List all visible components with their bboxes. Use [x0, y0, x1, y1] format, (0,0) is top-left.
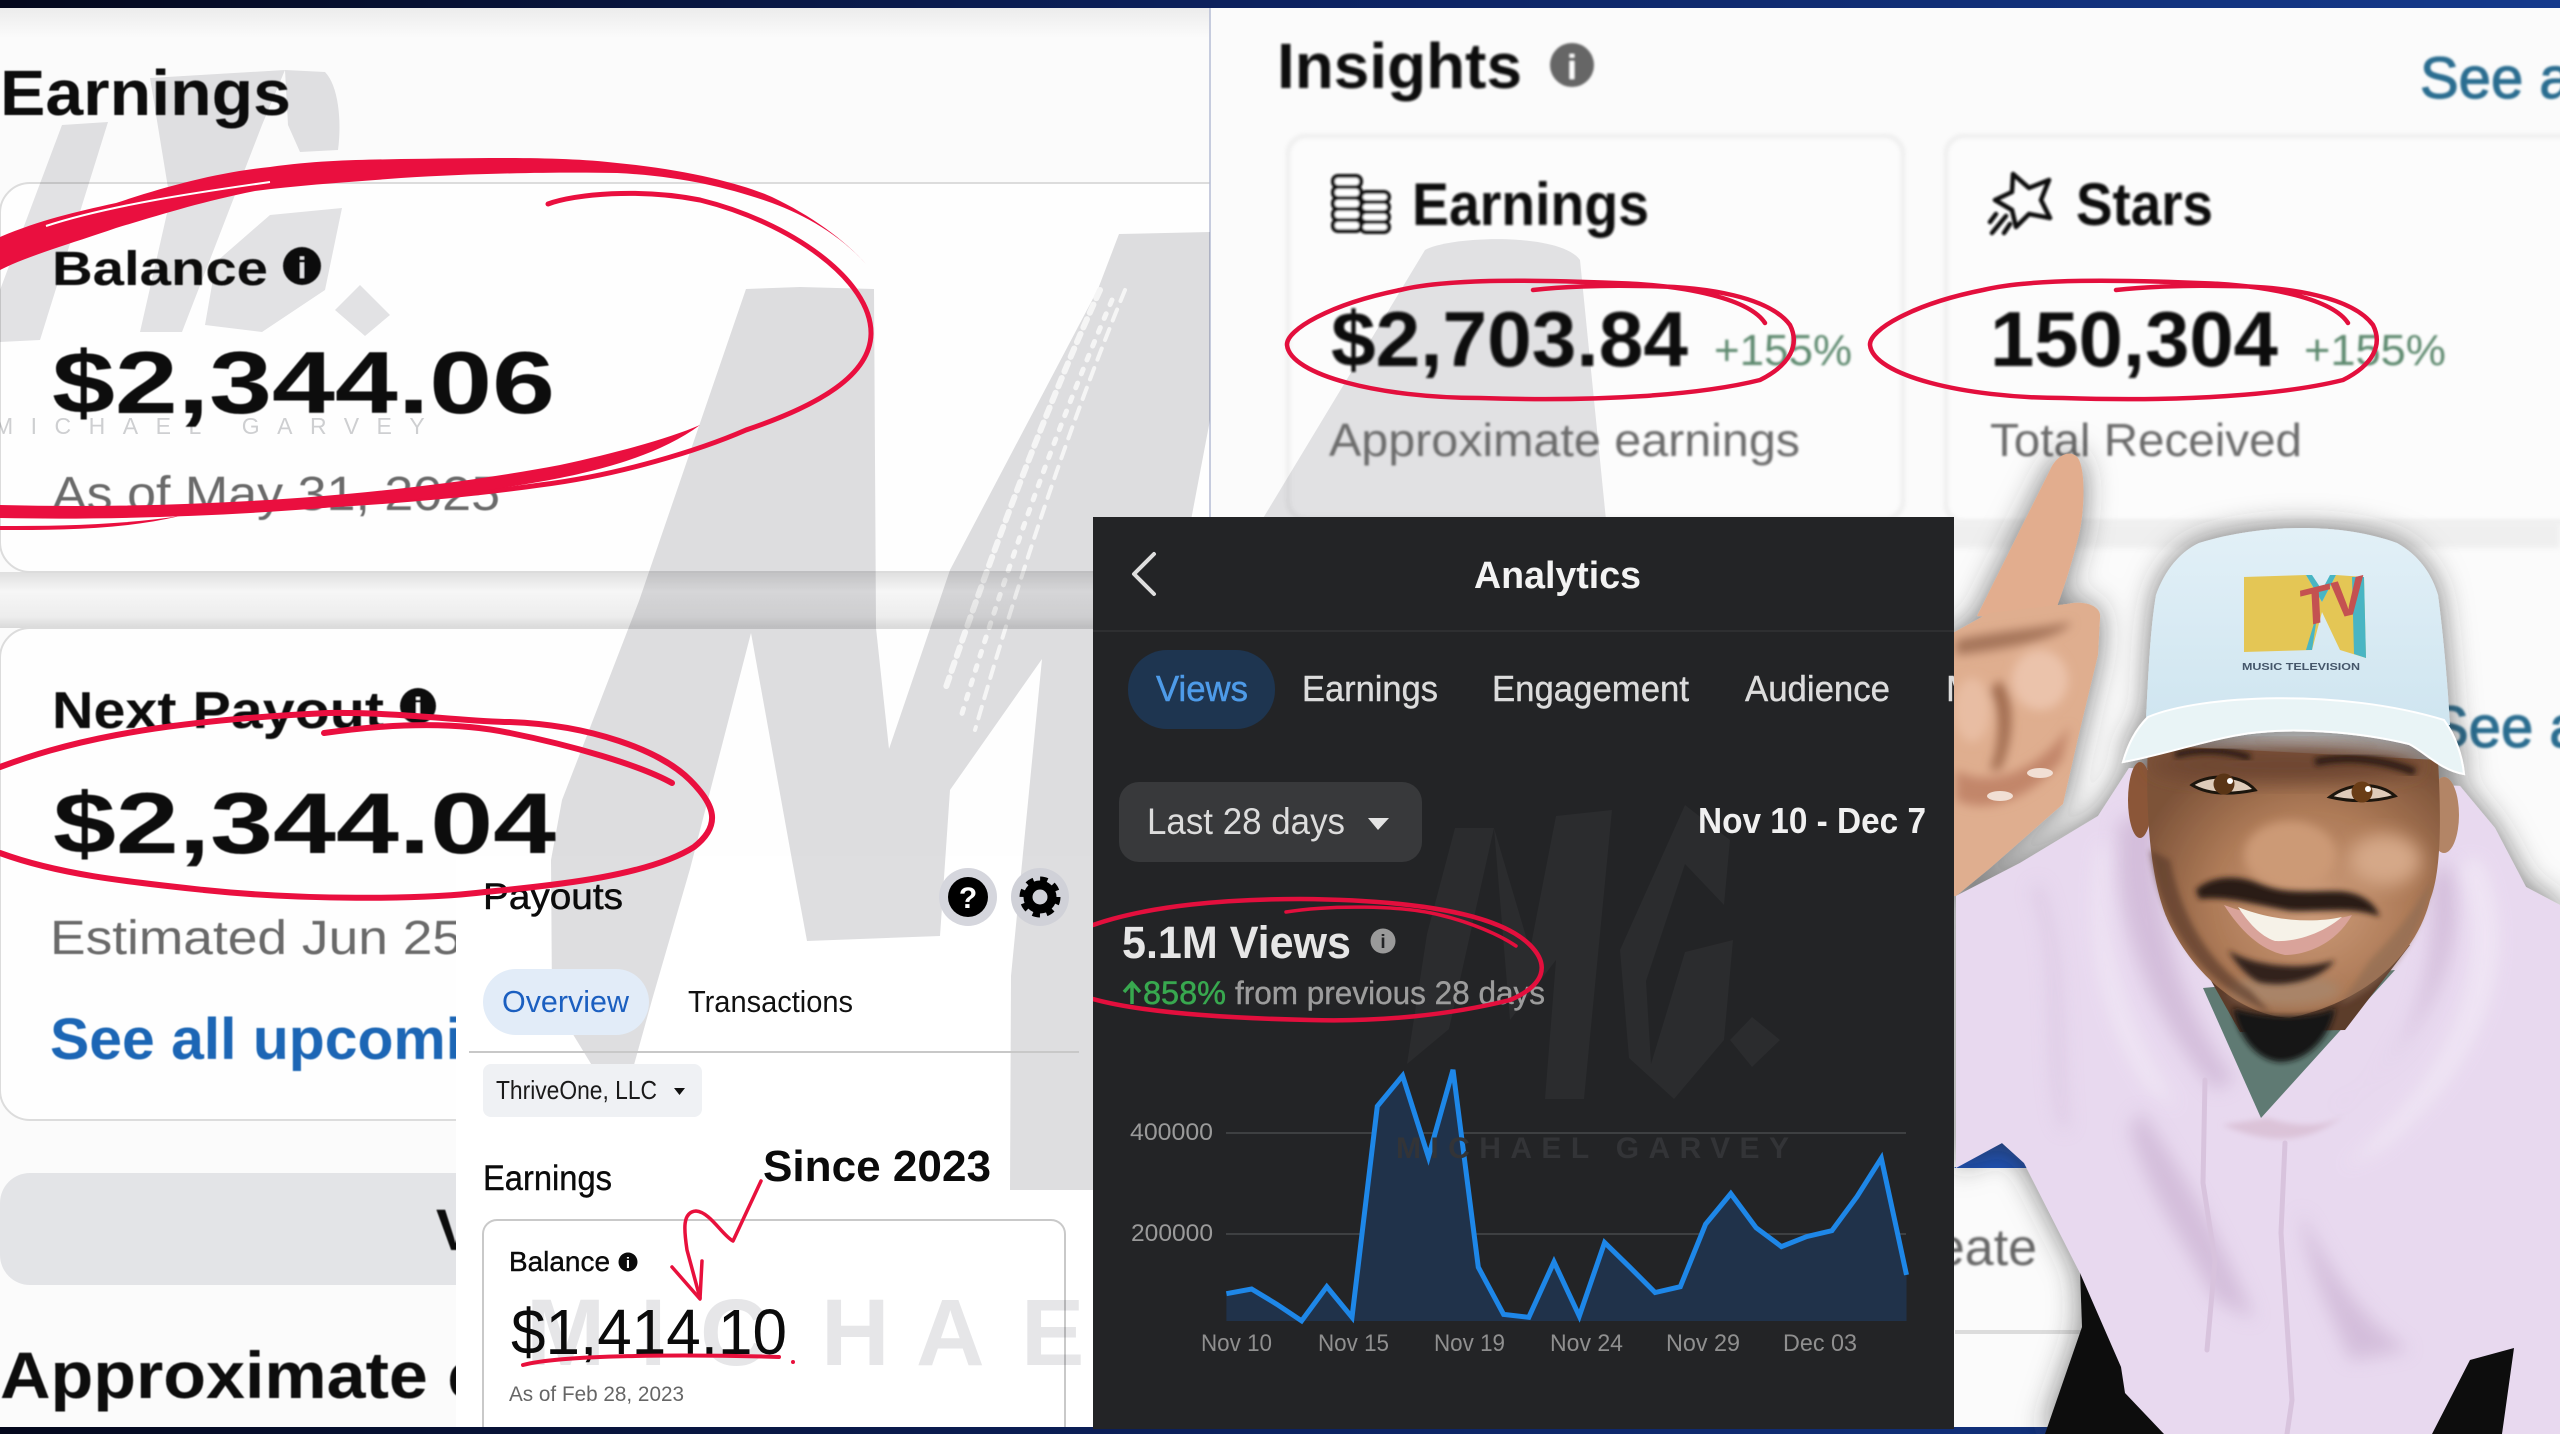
- left eye: [2192, 774, 2255, 794]
- left text block: [0, 57, 739, 1412]
- value: views: 5.1M Views: [1122, 917, 1351, 968]
- insights content: [1277, 30, 2560, 1334]
- panel: balance screenshot: [0, 8, 1260, 1285]
- dropdown: last 28 days: Last 28 days: [1147, 801, 1345, 842]
- fingernails: [2027, 768, 2053, 778]
- mustache: [2197, 879, 2378, 915]
- icon: shooting star: [1990, 174, 2050, 233]
- icon: help: [939, 868, 997, 926]
- ears: [2128, 762, 2152, 838]
- logo: TV: TV: [2293, 565, 2376, 638]
- payouts content: [469, 868, 1079, 1406]
- icon: insights info: [1550, 43, 1594, 87]
- face: [2128, 745, 2459, 1062]
- line chart: views: Nov 24: [1550, 1330, 1623, 1357]
- person: [1940, 454, 2560, 1434]
- delta: up 858 percent: [1122, 980, 1226, 1004]
- label: total received: Total Received: [1990, 414, 2302, 466]
- label: Earnings: Earnings: [1412, 171, 1649, 238]
- logo: caption: MUSIC TELEVISION: [2242, 661, 2360, 673]
- date range: Nov 10 - Dec 7: [1698, 800, 1926, 841]
- finger: [1977, 454, 2084, 625]
- callout: Since 2023: Since 2023: [763, 1142, 991, 1191]
- icon: insights info: i: [1567, 49, 1577, 87]
- tab: Overview: Overview: [502, 984, 630, 1019]
- stars card: [1946, 136, 2560, 522]
- icon: back chevron: [1134, 554, 1154, 594]
- arrow: since 2023 to balance: [672, 1181, 761, 1299]
- heading: Earnings: Earnings: [483, 1159, 612, 1198]
- line chart: views: 200000: [1131, 1220, 1213, 1247]
- delta: up 858 percent: 858%: [1143, 975, 1226, 1011]
- text: from previous: from previous 28 days: [1235, 975, 1545, 1011]
- line chart: views: Nov 15: [1318, 1330, 1389, 1357]
- underline: balance: [523, 1356, 794, 1365]
- value: balance 2023: $1,414.10: [511, 1296, 787, 1368]
- link: see all upcoming: See all upcoming: [50, 1007, 534, 1072]
- line chart: views: Dec 03: [1783, 1330, 1857, 1357]
- watermark: dark MG: [1407, 805, 1780, 1099]
- ink: earnings circle: [1287, 281, 1794, 399]
- panel: analytics: [1093, 517, 1976, 1429]
- line chart: views: Nov 19: [1434, 1330, 1505, 1357]
- y labels: 400000: [1130, 1119, 1213, 1146]
- text: date 2023: As of Feb 28, 2023: [509, 1382, 684, 1406]
- hoodie shading: [2030, 810, 2456, 1360]
- beard under lip: [2228, 950, 2335, 984]
- line: [1226, 1070, 1906, 1321]
- icon: views info: i: [1380, 932, 1386, 953]
- line chart: views: [1130, 1070, 1906, 1357]
- neck: [2205, 945, 2410, 1032]
- panel: insights screenshot: [1210, 8, 2560, 568]
- dropdown: ThriveOne: ThriveOne, LLC: [496, 1075, 657, 1105]
- watermark wordmark small: MICHAEL GARVEY: [0, 413, 442, 439]
- cap: [2123, 528, 2464, 774]
- icon: views info: [1370, 928, 1396, 954]
- hood highlight: [2094, 840, 2497, 1170]
- teeth: [2238, 907, 2342, 941]
- tab: Transactions: Transactions: [688, 984, 853, 1019]
- icon: payout info: [400, 688, 436, 724]
- right eye: [2330, 782, 2395, 802]
- line chart: views: Nov 29: [1666, 1330, 1740, 1357]
- insights brush: [1262, 239, 1606, 520]
- fist: [1940, 603, 2100, 896]
- earnings card: [1288, 136, 1903, 519]
- tab: Views: Views: [1156, 668, 1248, 709]
- value: balance: $2,344.06: [52, 333, 555, 432]
- heading: Analytics: Analytics: [1474, 555, 1641, 597]
- lower right card line: [1955, 1330, 2155, 1334]
- goatee: [2233, 1008, 2335, 1062]
- icon: balance info: [283, 247, 321, 285]
- icon: balance info small: [618, 1252, 638, 1272]
- crown: [2146, 528, 2450, 725]
- hoodie: [1956, 768, 2560, 1434]
- face highlights: [2349, 834, 2421, 886]
- gridlines: [1226, 1132, 1906, 1134]
- tab: Engagement: Engagement: [1492, 668, 1689, 709]
- label: Balance: Balance: [509, 1246, 610, 1277]
- dropdown: last 28 days: [1119, 782, 1422, 862]
- collar seam: [2222, 1115, 2345, 1139]
- tab: Views: [1128, 650, 1275, 729]
- icon: coin stacks: [1333, 176, 1389, 232]
- fist shading: [1954, 622, 2072, 806]
- text: estimated date: Estimated Jun 25: [50, 912, 462, 965]
- value: stars: 150,304: [1990, 295, 2278, 383]
- brush texture: [945, 290, 1125, 730]
- text: Create: Create: [1881, 1219, 2037, 1277]
- ink: balance circle: [0, 158, 871, 530]
- logo: yellow M: [2244, 575, 2366, 658]
- top band: [0, 0, 2560, 8]
- value: earnings: $2,703.84: [1331, 295, 1688, 383]
- tab: clipped: M: [1946, 668, 1976, 709]
- tab: Earnings: Earnings: [1302, 668, 1438, 709]
- heading: Payouts: Payouts: [483, 876, 623, 917]
- eyebrows: [2175, 751, 2250, 758]
- stubble: [2150, 850, 2270, 1012]
- label: Stars: Stars: [2076, 171, 2213, 238]
- next payout card: [0, 628, 1260, 1120]
- ink: views circle: [1093, 899, 1542, 1020]
- watermark: dark wordmark: MICHAEL GARVEY: [1396, 1132, 1789, 1165]
- icon: help: ?: [959, 882, 977, 915]
- mouth: [2224, 905, 2352, 955]
- icon: balance info: i: [298, 252, 306, 285]
- delta: stars: +155%: [2304, 326, 2446, 375]
- area: [1226, 1070, 1906, 1321]
- heading: Earnings: Earnings: [0, 57, 291, 129]
- icon: balance info small: i: [626, 1255, 630, 1272]
- grey button: [0, 1173, 540, 1285]
- card gap shading: [0, 572, 1210, 628]
- label: Balance: Balance: [52, 243, 268, 296]
- black shirt: [2045, 1270, 2200, 1434]
- label: approximate earnings: Approximate earnings: [1329, 414, 1800, 466]
- icon: settings gear: [1011, 868, 1069, 926]
- blue bar behind arm: [1950, 1143, 2030, 1170]
- panel: payouts screenshot: [456, 856, 1093, 1434]
- watermark: large MG brush: [0, 70, 1606, 1386]
- brim: [2123, 698, 2464, 774]
- heading: Insights: Insights: [1277, 30, 1522, 102]
- bottom band: [0, 1427, 2560, 1434]
- tab: Overview: [483, 969, 649, 1035]
- label: Next Payout: Next Payout: [52, 682, 384, 740]
- text: as of date: As of May 31, 2025: [52, 468, 500, 521]
- payouts wordmark: MICHAE: [526, 1280, 1084, 1386]
- icon: payout info: i: [414, 692, 422, 723]
- ink: stars circle: [1870, 281, 2377, 399]
- dropdown: ThriveOne: [483, 1064, 702, 1117]
- drawstrings: [2203, 1080, 2292, 1434]
- delta: earnings: +155%: [1714, 326, 1852, 375]
- heading: approximate: Approximate earnings: [0, 1338, 739, 1412]
- small MG at top left: [0, 70, 390, 342]
- x labels: Nov 10: [1201, 1330, 1272, 1357]
- value: next payout: $2,344.04: [53, 776, 556, 872]
- card: payouts balance: [483, 1220, 1065, 1434]
- undershirt: [2203, 970, 2395, 1118]
- balance card: [0, 183, 1260, 572]
- head: [2147, 745, 2440, 1018]
- large M: [551, 232, 1210, 1190]
- ink: next payout circle: [0, 713, 712, 898]
- button text: V: [436, 1198, 475, 1263]
- tab: Audience: Audience: [1745, 668, 1890, 709]
- nose: [2244, 821, 2336, 889]
